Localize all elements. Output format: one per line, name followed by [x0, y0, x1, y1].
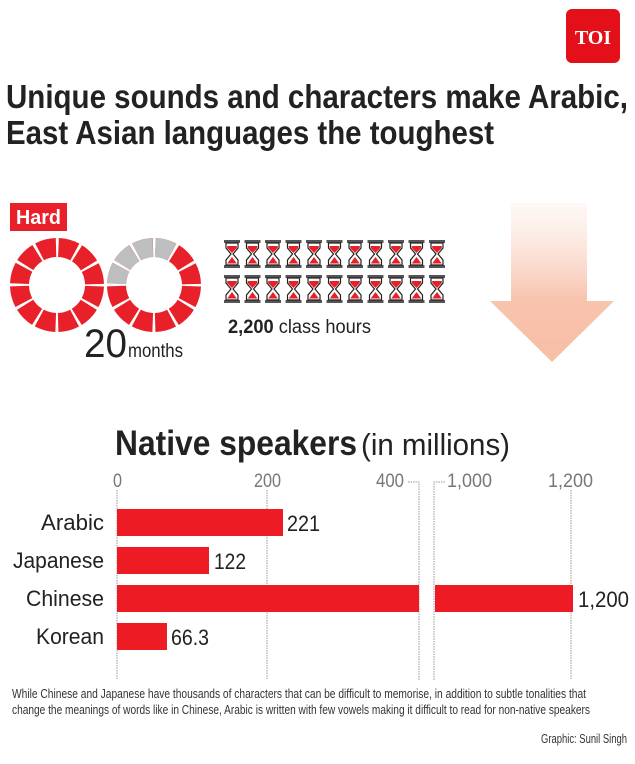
text: 20 months: 20 — [84, 322, 127, 366]
logo: TOI — [566, 9, 620, 63]
label: Hard: Hard — [16, 207, 61, 229]
values: 66.3 — [171, 625, 209, 650]
label: Hard — [10, 203, 67, 231]
axis labels: 1,000 — [447, 471, 492, 492]
axis labels: 400 — [376, 471, 404, 492]
title — [6, 78, 628, 151]
text: 20 months: months — [128, 341, 183, 362]
text: 20 months — [84, 322, 183, 366]
logo: TOI: TOI — [575, 27, 611, 49]
category labels: Arabic — [41, 510, 104, 535]
axis labels: 1,200 — [548, 471, 593, 492]
arrow: down — [490, 203, 614, 362]
values: 1,200 — [578, 587, 629, 612]
axis labels — [113, 471, 593, 492]
bar chart — [13, 471, 629, 680]
values: 221 — [287, 511, 320, 536]
axis labels: 0 — [113, 471, 122, 492]
axis labels: 200 — [254, 471, 281, 492]
category labels: Korean — [36, 624, 104, 649]
values — [171, 511, 629, 650]
category labels — [13, 510, 104, 649]
icon: donut 12 months — [20, 248, 94, 322]
chart title: Native speakers — [115, 424, 357, 463]
title: East Asian languages the toughest — [6, 114, 494, 151]
category labels: Chinese — [26, 586, 104, 611]
category labels: Japanese — [13, 548, 104, 573]
bars — [117, 509, 573, 650]
values: 122 — [214, 549, 246, 574]
chart title — [115, 424, 510, 463]
footnote — [12, 687, 590, 717]
text: class hours: 2,200 class hours — [228, 317, 371, 338]
icon grid: hourglasses — [224, 240, 445, 303]
icon: donut 8 of 12 months — [116, 248, 192, 322]
chart title: (in millions) — [361, 427, 510, 462]
